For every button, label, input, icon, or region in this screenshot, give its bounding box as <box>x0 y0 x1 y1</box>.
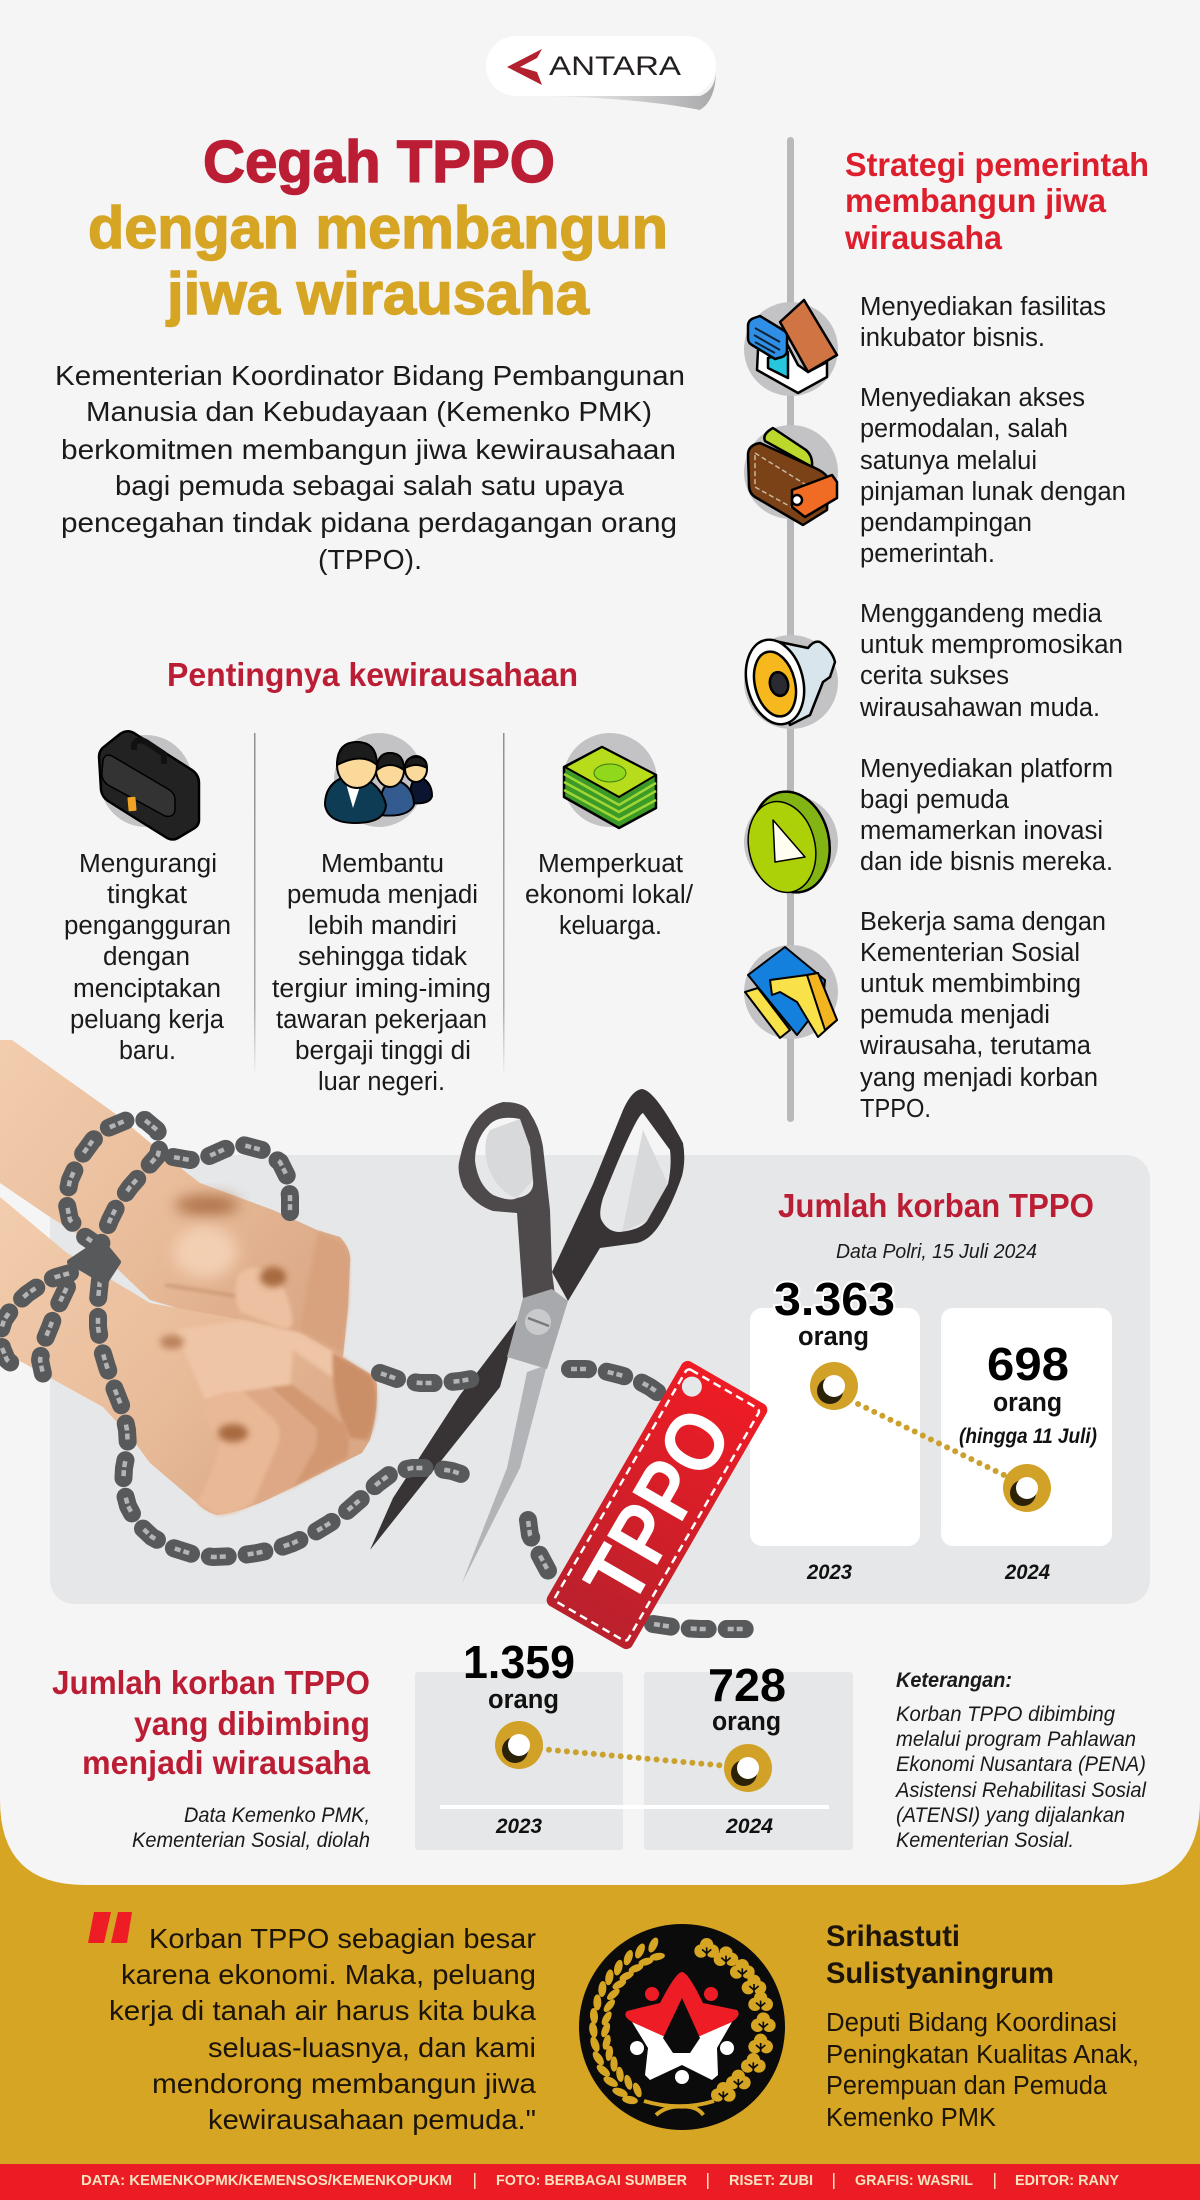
icon: play button <box>739 784 839 900</box>
intro paragraph <box>55 360 685 575</box>
ANTARA logo <box>486 36 716 110</box>
quote: Korban TPPO sebagian besar <box>149 1923 536 1954</box>
strategy item 5 text: pemuda menjadi <box>860 1001 1050 1029</box>
heading: guided victims: yang dibimbing <box>134 1705 370 1742</box>
importance column 3: keluarga. <box>559 912 662 940</box>
importance column 2: lebih mandiri <box>308 912 457 940</box>
strategy item 4 text: Menyediakan platform <box>860 755 1113 783</box>
strategy item 3 text <box>859 600 1123 722</box>
importance column 2: luar negeri. <box>318 1068 445 1096</box>
chart: guided victims 2023-2024: 1.359 <box>463 1636 575 1688</box>
chart: victim count 2023-2024: orang <box>798 1321 869 1351</box>
importance column 1: pengangguran <box>64 912 231 940</box>
strategy item 2 text: pemerintah. <box>860 540 995 568</box>
icon: briefcase <box>99 731 199 840</box>
star <box>632 2022 732 2080</box>
strategy heading: wirausaha <box>844 219 1003 256</box>
strategy item 3 text: untuk mempromosikan <box>860 631 1123 659</box>
strategy timeline line <box>787 137 794 1122</box>
quote: kerja di tanah air harus kita buka <box>109 1995 536 2026</box>
chart: guided victims 2023-2024: 2024 <box>725 1815 773 1838</box>
chart: victim count 2023-2024 <box>750 1273 1112 1584</box>
notes: Kementerian Sosial. <box>896 1829 1074 1852</box>
heading: victim count: Jumlah korban TPPO <box>778 1187 1094 1224</box>
panel: victim statistics <box>50 1155 1150 1604</box>
strategy item 2 text: satunya melalui <box>860 447 1037 475</box>
notes: (ATENSI) yang dijalankan <box>896 1804 1125 1827</box>
importance column 2 <box>272 850 491 1096</box>
ANTARA logo: ANTARA <box>549 51 681 81</box>
heading: guided victims: Jumlah korban TPPO <box>52 1664 370 1701</box>
strategy item 5 text: wirausaha, terutama <box>859 1032 1092 1060</box>
importance column 3: Memperkuat <box>538 850 683 878</box>
icon: quotation mark <box>88 1912 132 1943</box>
icon: money stack <box>563 733 657 828</box>
strategy item 5 text: TPPO. <box>860 1095 931 1123</box>
quote <box>109 1923 536 2135</box>
speaker name <box>826 1920 1054 1990</box>
speaker role: Perempuan dan Pemuda <box>826 2072 1108 2100</box>
importance column 2: sehingga tidak <box>298 943 467 971</box>
strategy item 3 text: Menggandeng media <box>860 600 1103 628</box>
title: jiwa wirausaha <box>166 261 590 327</box>
icon: speaker <box>737 634 838 730</box>
importance column 1: menciptakan <box>73 975 221 1003</box>
strategy item 2 text: pinjaman lunak dengan <box>860 478 1126 506</box>
strategy item 5 text: Kementerian Sosial <box>860 939 1080 967</box>
strategy item 5 text: Bekerja sama dengan <box>860 908 1106 936</box>
chart: victim count 2023-2024: orang <box>993 1387 1062 1417</box>
speaker role: Peningkatan Kualitas Anak, <box>826 2041 1139 2069</box>
strategy item 1 text: Menyediakan fasilitas <box>860 293 1106 321</box>
quote: mendorong membangun jiwa <box>152 2068 536 2099</box>
chart: guided victims 2023-2024: orang <box>712 1706 781 1736</box>
speaker role: Deputi Bidang Koordinasi <box>826 2009 1117 2037</box>
chart: guided victims 2023-2024: 2023 <box>495 1815 542 1838</box>
icon: handshake blocks <box>744 945 838 1039</box>
importance column 1: Mengurangi <box>79 850 217 878</box>
notes: Ekonomi Nusantara (PENA) <box>896 1753 1146 1776</box>
heading: guided victims <box>52 1664 371 1781</box>
heading: guided victims: menjadi wirausaha <box>82 1744 371 1781</box>
notes <box>894 1669 1147 1852</box>
speaker role: Kemenko PMK <box>826 2104 996 2132</box>
strategy item 1 text: inkubator bisnis. <box>860 324 1045 352</box>
title <box>88 129 668 327</box>
speaker role <box>826 2009 1139 2132</box>
importance column 3: ekonomi lokal/ <box>525 881 694 909</box>
strategy heading: membangun jiwa <box>845 182 1107 219</box>
strategy item 4 text: dan ide bisnis mereka. <box>860 848 1113 876</box>
footer credits: EDITOR: RANY <box>1015 2173 1119 2189</box>
chart: victim count 2023-2024: (hingga 11 Juli) <box>959 1425 1097 1448</box>
importance column 2: tergiur iming-iming <box>272 975 491 1003</box>
intro paragraph: berkomitmen membangun jiwa kewirausahaan <box>61 434 676 465</box>
icon: wallet <box>744 425 838 525</box>
footer credits: DATA: KEMENKOPMK/KEMENSOS/KEMENKOPUKM <box>81 2173 452 2189</box>
wheat wreath <box>588 1936 714 2115</box>
chart: victim count 2023-2024: 2023 <box>806 1561 852 1584</box>
source note: Polri: Data Polri, 15 Juli 2024 <box>836 1240 1037 1263</box>
icon: people <box>325 733 432 827</box>
strategy item 2 text <box>860 384 1126 568</box>
emblem: Kemenko PMK <box>579 1924 785 2130</box>
intro paragraph: Manusia dan Kebudayaan (Kemenko PMK) <box>86 396 652 427</box>
footer credits <box>0 2164 1200 2200</box>
strategy item 4 text <box>860 755 1113 876</box>
footer credits: GRAFIS: WASRIL <box>855 2173 973 2189</box>
chains around wrists <box>0 1120 760 1629</box>
strategy item 5 text: yang menjadi korban <box>860 1064 1098 1092</box>
strategy item 2 text: pendampingan <box>860 509 1032 537</box>
quote: karena ekonomi. Maka, peluang <box>121 1959 536 1990</box>
title: dengan membangun <box>88 195 668 261</box>
importance column 2: Membantu <box>321 850 444 878</box>
source note: Kemenko PMK <box>132 1804 370 1852</box>
importance column 2: bergaji tinggi di <box>295 1037 471 1065</box>
importance column 1 <box>64 850 231 1065</box>
strategy item 4 text: bagi pemuda <box>860 786 1010 814</box>
chart: victim count 2023-2024: 2024 <box>1004 1561 1050 1584</box>
icon: house with speech bubble <box>744 300 838 396</box>
chart: guided victims 2023-2024: 728 <box>708 1659 786 1711</box>
strategy heading: Strategi pemerintah <box>845 146 1149 183</box>
column dividers <box>254 733 504 1073</box>
illustration: scissors <box>370 1089 684 1583</box>
importance column 1: peluang kerja <box>70 1006 225 1034</box>
title: Cegah TPPO <box>203 129 555 195</box>
importance column 1: dengan <box>103 943 190 971</box>
intro paragraph: Kementerian Koordinator Bidang Pembangunan <box>55 360 685 391</box>
importance column 3 <box>525 850 694 940</box>
chart: guided victims 2023-2024: orang <box>488 1684 559 1714</box>
source note: Kemenko PMK: Data Kemenko PMK, <box>184 1804 370 1827</box>
quote: kewirausahaan pemuda." <box>208 2104 536 2135</box>
strategy item 2 text: Menyediakan akses <box>860 384 1085 412</box>
chart: victim count 2023-2024: 3.363 <box>774 1273 895 1325</box>
strategy item 5 text: untuk membimbing <box>860 970 1081 998</box>
notes: Keterangan: <box>896 1669 1012 1692</box>
notes: melalui program Pahlawan <box>896 1728 1136 1751</box>
importance column 2: pemuda menjadi <box>287 881 478 909</box>
importance column 1: tingkat <box>107 881 187 909</box>
notes: Korban TPPO dibimbing <box>896 1703 1115 1726</box>
intro paragraph: bagi pemuda sebagai salah satu upaya <box>115 470 624 501</box>
speaker name: Srihastuti <box>826 1920 960 1953</box>
notes: Asistensi Rehabilitasi Sosial <box>894 1779 1147 1802</box>
strategy item 5 text <box>859 908 1106 1123</box>
quote: seluas-luasnya, dan kami <box>208 2032 536 2063</box>
chart: guided victims 2023-2024 <box>415 1636 853 1850</box>
strategy item 3 text: wirausahawan muda. <box>859 694 1100 722</box>
chart: victim count 2023-2024: 698 <box>987 1338 1069 1390</box>
importance column 2: tawaran pekerjaan <box>276 1006 487 1034</box>
intro paragraph: pencegahan tindak pidana perdagangan orang <box>61 507 677 538</box>
illustration: chained hands <box>0 1040 377 1515</box>
footer credits: FOTO: BERBAGAI SUMBER <box>496 2173 688 2189</box>
strategy item 2 text: permodalan, salah <box>860 415 1068 443</box>
cotton wreath <box>694 1938 776 2103</box>
intro paragraph: (TPPO). <box>318 544 422 575</box>
importance column 1: baru. <box>119 1037 176 1065</box>
strategy heading <box>844 146 1149 256</box>
source note: Kemenko PMK: Kementerian Sosial, diolah <box>132 1829 370 1852</box>
speaker name: Sulistyaningrum <box>826 1957 1054 1990</box>
strategy item 3 text: cerita sukses <box>860 662 1009 690</box>
strategy item 1 text <box>860 293 1106 352</box>
importance heading: Pentingnya kewirausahaan <box>167 656 578 693</box>
footer credits: RISET: ZUBI <box>729 2173 813 2189</box>
strategy item 4 text: memamerkan inovasi <box>860 817 1103 845</box>
tag: TPPO: TPPO <box>566 1393 750 1618</box>
